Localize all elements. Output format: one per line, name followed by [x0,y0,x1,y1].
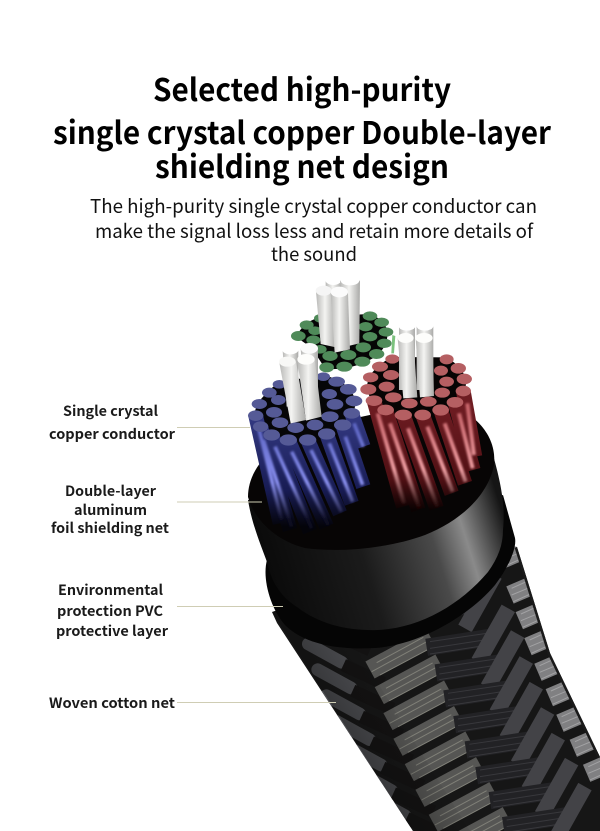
subtitle text block: the sound [271,240,357,267]
label: single crystal copper conductor [49,401,250,444]
lower black ring [266,495,515,648]
label: double-layer aluminum foil shielding net: aluminum [74,500,147,520]
green conductor bundle [291,275,395,372]
title: shielding net design [155,142,449,187]
black top face [248,400,494,550]
label: double-layer aluminum foil shielding net: foil shielding net [51,518,169,538]
label: double-layer aluminum foil shielding net: Double-layer [65,481,157,501]
subtitle text block [90,192,537,267]
label: double-layer aluminum foil shielding net [51,481,262,538]
PVC cylinder side [248,455,504,630]
label: single crystal copper conductor: Single crystal [63,401,159,421]
label: single crystal copper conductor: copper conductor [49,424,176,444]
title: Selected high-purity [153,65,451,110]
subtitle text block: The high-purity single crystal copper conductor can [90,192,537,219]
label: environmental protection PVC protective layer: protection PVC [57,601,163,621]
woven cotton net braid [272,546,600,831]
label: woven cotton net: Woven cotton net [49,693,175,713]
label: environmental protection PVC protective layer: Environmental [58,580,164,600]
title [53,65,551,187]
blue conductor bundle [248,343,363,532]
subtitle text block: make the signal loss less and retain more details of [95,217,534,244]
title: single crystal copper Double-layer [53,108,551,153]
red conductor bundle [360,321,475,510]
cable illustration [248,280,600,831]
label: environmental protection PVC protective layer [56,580,283,641]
label: environmental protection PVC protective layer: protective layer [56,621,169,641]
